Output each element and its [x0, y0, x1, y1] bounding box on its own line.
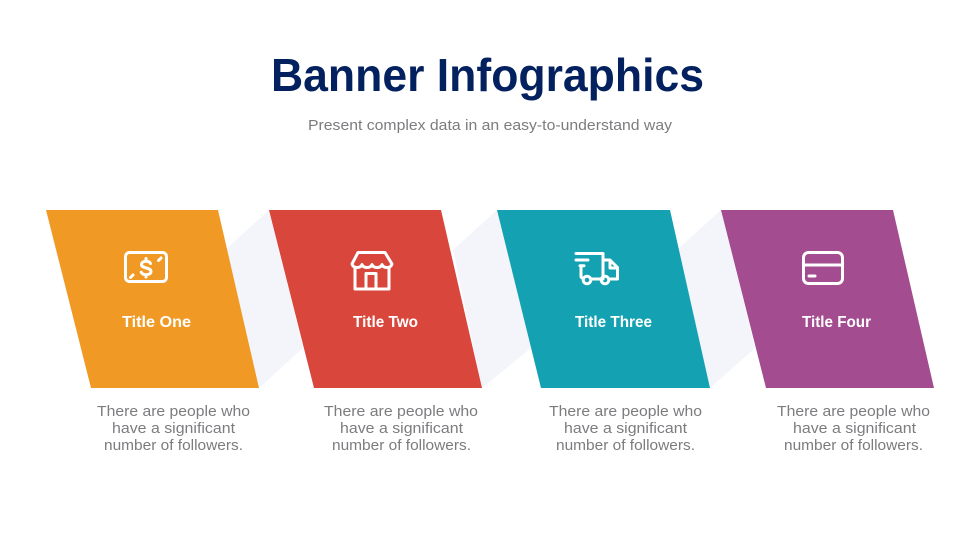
description three	[549, 404, 702, 454]
description four: There are people who	[777, 404, 930, 420]
title: Banner Infographics	[271, 49, 704, 101]
description two: have a significant	[340, 421, 463, 437]
label: title four: Title Four	[802, 314, 871, 331]
label: title one: Title One	[122, 314, 191, 331]
description two: There are people who	[324, 404, 478, 420]
panel: title one	[46, 210, 259, 388]
description four	[777, 404, 930, 454]
icon: credit card	[804, 252, 842, 284]
panel: title two	[269, 210, 482, 388]
icon: truck	[576, 254, 618, 284]
subtitle: Present complex data in an easy-to-understand way	[308, 117, 673, 134]
label: title two: Title Two	[353, 314, 418, 331]
ribbon connector one	[225, 210, 303, 388]
description two: number of followers.	[332, 438, 471, 454]
panel: title four	[721, 210, 934, 388]
description one	[97, 404, 250, 454]
description three: have a significant	[564, 421, 687, 437]
ribbon connector three	[677, 210, 755, 388]
description four: number of followers.	[784, 438, 923, 454]
ribbon connector two	[453, 210, 531, 388]
description four: have a significant	[793, 421, 916, 437]
label: title three: Title Three	[575, 314, 652, 331]
icon: money	[126, 252, 166, 282]
panel: title three	[497, 210, 710, 388]
icon: store	[352, 252, 392, 289]
description one: have a significant	[112, 421, 235, 437]
description two	[324, 404, 478, 454]
description three: number of followers.	[556, 438, 695, 454]
description one: number of followers.	[104, 438, 243, 454]
description one: There are people who	[97, 404, 250, 420]
description three: There are people who	[549, 404, 702, 420]
